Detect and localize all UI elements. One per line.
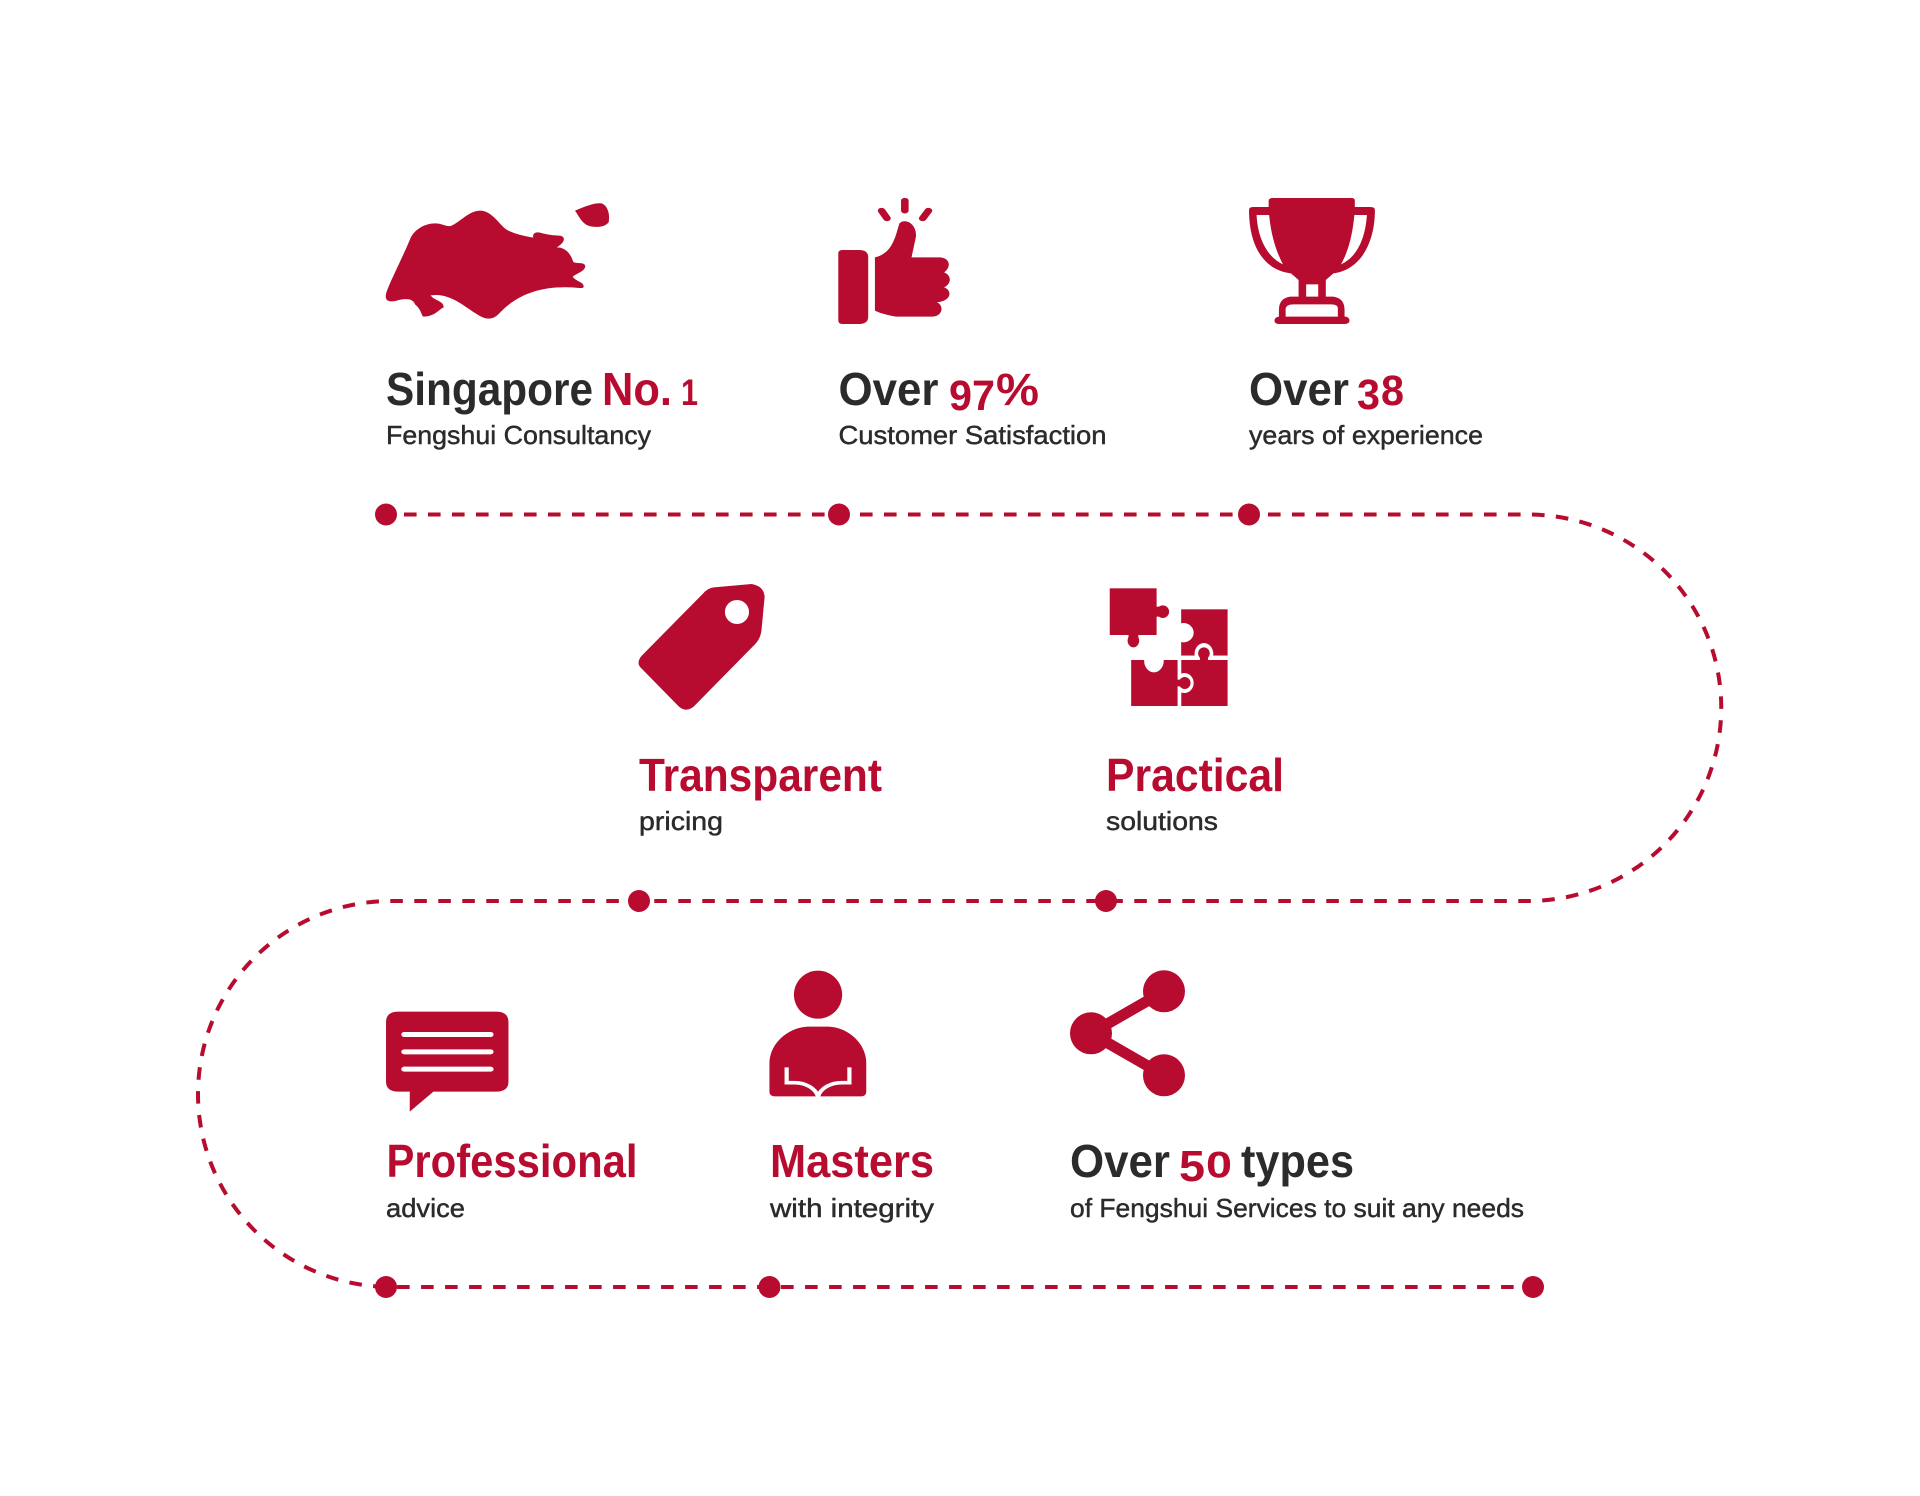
heading: 97 <box>949 372 995 420</box>
item: Practical solutions <box>1106 588 1284 836</box>
heading <box>838 363 1039 420</box>
heading: 5 <box>1179 1142 1205 1191</box>
timeline dots <box>375 504 1544 1298</box>
heading: % <box>996 364 1039 415</box>
item: Over 50 types <box>1070 970 1524 1223</box>
heading: types <box>1241 1135 1354 1187</box>
subheading: advice <box>386 1193 465 1223</box>
heading: Professional <box>386 1135 638 1187</box>
heading: Over <box>838 363 939 415</box>
heading <box>1070 1135 1354 1191</box>
subheading: years of experience <box>1249 420 1483 450</box>
subheading: pricing <box>639 806 723 836</box>
heading: 1 <box>681 372 698 413</box>
subheading: Customer Satisfaction <box>838 420 1106 450</box>
item: Masters with integrity <box>769 971 934 1223</box>
heading: Over <box>1070 1135 1170 1187</box>
heading: Masters <box>770 1135 934 1187</box>
heading: 8 <box>1381 367 1404 415</box>
icon: share nodes <box>1070 970 1185 1096</box>
item: Singapore No. 1 <box>386 203 698 450</box>
icon: person reading book <box>769 971 866 1096</box>
subheading: solutions <box>1106 806 1218 836</box>
icon: price tag <box>639 584 765 710</box>
subheading: with integrity <box>769 1193 934 1223</box>
icon: trophy <box>1249 198 1375 324</box>
icon: thumbs up <box>838 201 950 324</box>
heading: Over <box>1249 363 1349 415</box>
item: Over 97% <box>838 201 1106 450</box>
subheading: of Fengshui Services to suit any needs <box>1070 1193 1524 1223</box>
heading: Practical <box>1106 749 1284 801</box>
heading: No. <box>602 363 672 415</box>
item: Over 38 <box>1249 198 1483 450</box>
heading: 3 <box>1357 371 1380 419</box>
icon: puzzle pieces <box>1110 588 1232 706</box>
dashed journey path <box>198 514 1721 1287</box>
icon: Singapore map <box>386 203 609 319</box>
icon: speech bubble <box>386 1012 508 1112</box>
heading: 0 <box>1206 1145 1232 1186</box>
item: Transparent pricing <box>639 584 882 836</box>
subheading: Fengshui Consultancy <box>386 420 651 450</box>
item: Professional advice <box>386 1012 638 1223</box>
heading <box>1249 363 1404 419</box>
heading: Singapore <box>386 363 593 415</box>
heading: Transparent <box>639 749 882 801</box>
